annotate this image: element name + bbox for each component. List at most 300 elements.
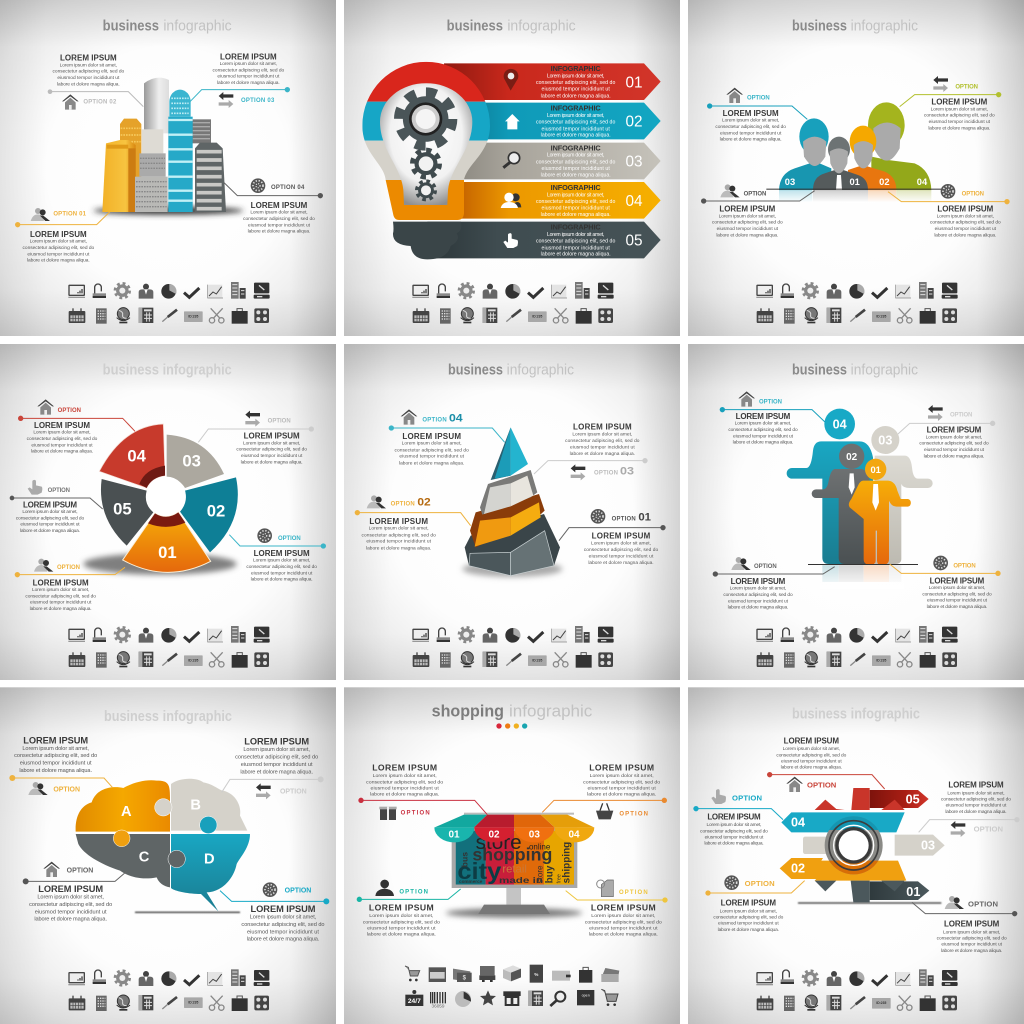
title: business [103,19,159,35]
banner 04: 04 [625,193,643,210]
text block top left: LOREM IPSUM [402,432,461,441]
text block 01: consectetur adipiscing elit, sed do [937,936,1007,942]
red teeth [815,788,905,810]
text block right: consectetur adipiscing elit, sed do [584,547,658,553]
option label teal: OPTION [399,889,428,895]
banner 03: eiusmod tempor incididunt ut [541,166,610,172]
screen: retail [502,863,527,875]
icon: sale [530,965,543,983]
icon: house [786,777,803,792]
text block top: Lorem ipsum dolor sit amet, [783,746,840,752]
leader: olive [900,92,1001,107]
icon: building [96,652,107,668]
text block A: labore et dolore magna aliqua. [19,768,92,774]
icon: pen [850,997,865,1009]
text block 03: LOREM IPSUM [244,432,300,441]
title: business [792,19,847,35]
icon rows [68,282,270,324]
ground line [766,189,941,190]
text block 02 [246,549,317,583]
banner 05: eiusmod tempor incididunt ut [541,245,610,251]
icon: persons [28,782,48,795]
banner 04: Lorem ipsum dolor sit amet, [547,192,604,198]
icon: briefcase [576,653,592,668]
leader: orange [355,510,471,526]
icon: pie [849,628,865,643]
text block A: LOREM IPSUM [23,735,88,745]
text block left top: labore et dolore magna aliqua. [720,137,782,143]
leader: option 04 [224,183,323,198]
text block top right: eiusmod tempor incididunt ut [587,785,656,791]
leader: teal [220,891,329,904]
icon: lock [437,628,450,642]
banner 02: INFOGRAPHIC [551,104,601,113]
text block left: Lorem ipsum dolor sit amet, [369,526,429,532]
icon: globe [591,509,605,524]
icon: globe [805,652,818,667]
option label 03: OPTION [594,471,618,477]
icon: check [184,975,199,985]
icon: pie [849,971,865,986]
icon: briefcase [232,996,248,1011]
text block right: LOREM IPSUM [592,532,651,541]
icon: pen [162,310,177,322]
screen: made in [499,875,543,885]
icon: monitor [68,285,85,298]
icon: monitor [68,972,85,985]
text block top left: Lorem ipsum dolor sit amet, [735,421,791,427]
text block 05 [941,781,1011,815]
banner 03: 03 [625,153,643,170]
text block top right: eiusmod tempor incididunt ut [924,447,985,453]
screen: city [457,858,502,884]
banner 01: INFOGRAPHIC [551,64,601,73]
text block 02: labore et dolore magna aliqua. [718,927,779,933]
leader: orange [705,881,805,896]
layered pyramid [462,427,562,577]
screen: store [536,865,545,883]
title [792,19,918,35]
icon: building [784,996,795,1011]
text block top right: Lorem ipsum dolor sit amet, [926,434,982,440]
leader: teal [720,407,825,422]
icon: id card: ID:235 [876,1001,886,1005]
icon: laptop [254,970,270,986]
shopping icon rows [405,965,619,1009]
text block right: Lorem ipsum dolor sit amet, [591,540,651,546]
piece C [76,834,170,887]
gear numbers: 03 [921,839,935,853]
awning numbers: 01 [448,829,460,840]
text block left bottom: consectetur adipiscing elit, sed do [712,220,783,226]
text block top left: Lorem ipsum dolor sit amet, [402,441,462,447]
text block top: consectetur adipiscing elit, sed do [776,752,847,758]
icon: calculator [139,652,153,667]
icon: briefcase [232,653,248,668]
text block 03: labore et dolore magna aliqua. [241,459,303,465]
icon: globe [117,652,130,667]
icon: arrows [933,76,948,92]
band teal [781,812,905,832]
text block left bottom [712,205,783,238]
text block top right [212,52,284,86]
icon: businessman [139,971,153,986]
text block left bottom: Lorem ipsum dolor sit amet, [719,213,776,219]
title: infographic [851,19,918,35]
text block B [235,737,318,775]
text block D: eiusmod tempor incididunt ut [247,929,319,935]
icon: chart [208,972,223,985]
option label 02: OPTION [391,502,415,508]
badge numbers: 02 [879,177,890,187]
icon: hand white [503,233,518,248]
icon: money: $ [463,975,467,981]
icon: businessman [483,284,497,299]
layer teal [491,427,528,480]
segment 01 [123,512,211,572]
icon: monitor [756,629,773,642]
icon: chart [552,285,567,298]
icon: laptop [254,627,270,643]
icon: arrows [951,821,965,837]
icon rows [68,969,270,1011]
icon: id card [872,998,891,1009]
icon: check [872,975,887,985]
panel: gear [688,687,1024,1024]
text block bottom right: eiusmod tempor incididunt ut [927,598,988,604]
text block top right: consectetur adipiscing elit, sed do [919,441,989,447]
banner 02: Lorem ipsum dolor sit amet, [547,113,604,119]
icon: calculator [139,995,153,1010]
icon: money [453,969,472,982]
wheel numbers: 04 [127,446,147,465]
wheel numbers: 05 [113,500,132,519]
icon: calendar [69,652,85,667]
text block 02: Lorem ipsum dolor sit amet, [253,558,310,564]
text block 03 [236,432,307,465]
icon: building [784,308,795,324]
text block bottom left: LOREM IPSUM [369,903,434,913]
icon: arrows [219,92,233,108]
text block top right: consectetur adipiscing elit, sed do [583,779,660,785]
option label gray: OPTION [280,788,307,795]
option label 04: 04 [449,412,463,424]
text block 01: labore et dolore magna aliqua. [941,948,1002,954]
icon: pie [161,628,177,643]
text block top left: eiusmod tempor incididunt ut [370,785,439,791]
icon: check [184,288,199,297]
text block top left: consectetur adipiscing elit, sed do [728,427,798,433]
icon: briefcase [920,309,936,324]
text block 01: eiusmod tempor incididunt ut [941,942,1003,948]
icon: towers [919,626,934,643]
icon: globe [117,995,130,1011]
title [447,19,576,35]
option label teal: OPTION [285,887,311,894]
gear numbers: 01 [906,885,920,899]
icon: building [440,652,451,668]
icon: globe [805,308,818,323]
icon: check [184,632,199,641]
reflection [779,190,931,202]
icon: check [872,288,887,297]
text block top left: eiusmod tempor incididunt ut [733,433,794,439]
text block 01: Lorem ipsum dolor sit amet, [32,587,89,593]
icon: box [503,965,521,981]
option label dark: OPTION [48,488,70,494]
icon: id card [184,997,203,1008]
title: infographic [163,19,232,35]
text block right top [924,98,995,131]
icon: calendar [757,308,773,323]
title: infographic [509,701,592,720]
title: infographic [851,363,918,379]
banner 01 [444,63,661,100]
text block 04: Lorem ipsum dolor sit amet, [33,430,91,436]
banner 04: INFOGRAPHIC [551,183,601,192]
title: shopping [432,701,504,720]
icon: badge [455,991,471,1007]
option label 03 [594,466,634,478]
text block top right: labore et dolore magna aliqua. [570,451,635,457]
text block top right: Lorem ipsum dolor sit amet, [590,773,654,779]
text block top left: consectetur adipiscing elit, sed do [394,447,469,453]
icon: towers [231,626,246,643]
leader: teal [707,103,807,119]
wheel chart [83,424,238,575]
text block bottom left: Lorem ipsum dolor sit amet, [369,913,433,919]
letters: A [121,804,132,820]
text block left bottom: eiusmod tempor incididunt ut [717,226,779,232]
icon: building [784,652,795,668]
icon: businessman [827,628,841,643]
icon: id card: ID:235 [532,314,542,318]
text block top left: eiusmod tempor incididunt ut [57,75,120,81]
wheel numbers: 01 [158,543,177,562]
option label teal: OPTION [732,793,762,802]
title: infographic [163,709,232,725]
text block top right: consectetur adipiscing elit, sed do [212,67,284,73]
icon: pen [850,310,865,322]
icon: id card: ID:235 [188,658,198,662]
gear large [399,92,453,146]
icon: grid [942,308,957,323]
icon: star [480,990,496,1005]
leader: red [767,772,885,789]
leader: dark [23,871,127,884]
text block top: LOREM IPSUM [784,736,839,745]
icon: globe [461,652,474,667]
panel: segmented wheel [0,344,336,680]
text block B: consectetur adipiscing elit, sed do [235,755,318,761]
screen: free [557,874,563,883]
title: business [792,706,847,722]
text block top right: Lorem ipsum dolor sit amet, [220,61,277,67]
text block top left: Lorem ipsum dolor sit amet, [60,62,117,68]
text block 05: consectetur adipiscing elit, sed do [16,515,84,521]
text block C: Lorem ipsum dolor sit amet, [37,895,104,901]
figure 01 orange [849,459,911,565]
icon: hand [711,789,726,804]
text block top right: labore et dolore magna aliqua. [587,792,656,798]
monitor [434,813,594,918]
text block 05: eiusmod tempor incididunt ut [20,522,80,528]
figure numbers: 04 [833,418,847,432]
piece B [171,779,247,831]
icon: globe [461,308,474,323]
panel: brain puzzle [0,687,336,1024]
icon: towers [231,969,246,986]
text block bottom left: consectetur adipiscing elit, sed do [723,592,793,598]
option label orange: OPTION [745,879,775,888]
icon: pin [504,69,518,91]
option label red: OPTION [807,781,837,790]
text block 04: eiusmod tempor incididunt ut [705,834,764,840]
gear ring top [829,816,878,830]
icon: pen [850,654,865,666]
text block D: LOREM IPSUM [251,904,316,914]
option label gray: OPTION [268,419,291,425]
icon: id card [872,655,891,666]
icon: grid [598,308,613,323]
icon: grid [254,996,269,1010]
icon: gear [459,283,474,298]
banner 02 [444,103,661,139]
icon: pie [161,284,177,299]
option label gray: OPTION [974,824,1003,833]
icon: businessman [483,628,497,643]
icon: sale: % [534,972,539,977]
icon: building [96,996,107,1011]
title dots [496,723,527,729]
figure 03 gray [871,426,933,564]
icon: id card [528,311,547,322]
badge numbers: 04 [917,177,928,187]
leader: dark [912,902,1017,916]
text block right bottom [930,205,1001,238]
text block top left: labore et dolore magna aliqua. [57,81,120,87]
icon: towers [919,969,934,986]
title [448,363,574,379]
figure numbers: 02 [846,452,858,463]
icon: id card: ID:235 [532,658,542,662]
icon: gear [803,283,818,298]
icon: businessman [827,971,841,986]
text block 05: Lorem ipsum dolor sit amet, [22,509,78,515]
text block bottom left: LOREM IPSUM [731,577,786,586]
text block right [584,532,658,566]
text block top left [394,432,469,466]
banner 05: labore et dolore magna aliqua. [541,252,611,258]
title: business [792,363,847,379]
text block bottom right [922,576,992,610]
icon: chart [208,285,223,298]
layer dark [465,514,560,576]
screen: store [476,831,522,854]
bust 01 dark [813,137,868,190]
icon: pen [506,654,521,666]
icon: chart [896,285,911,298]
text block left [361,517,436,551]
leader: teal [693,806,783,820]
text block right top: Lorem ipsum dolor sit amet, [931,106,988,112]
text block B: labore et dolore magna aliqua. [240,769,313,775]
option label 01: OPTION [612,517,636,523]
inner shadow top [139,466,165,488]
text block C: consectetur adipiscing elit, sed do [29,902,112,908]
icon: cart down [405,966,420,981]
banner 04: labore et dolore magna aliqua. [541,212,611,218]
icon: calendar [413,308,429,323]
icon rows [756,282,958,324]
option label orange: OPTION [962,191,984,197]
text block right top: labore et dolore magna aliqua. [928,125,990,131]
icon: monitor [756,285,773,298]
banner 05: consectetur adipiscing elit, sed do [536,239,615,245]
text block 02: LOREM IPSUM [254,549,310,558]
icon: businessman [139,284,153,299]
text block top: eiusmod tempor incididunt ut [781,758,842,764]
banner 03: INFOGRAPHIC [551,143,601,152]
text block left: LOREM IPSUM [369,517,428,526]
reflection fade [775,191,935,203]
text block 04: eiusmod tempor incididunt ut [31,442,93,448]
icon rows [756,969,958,1011]
text block 02: labore et dolore magna aliqua. [251,577,313,583]
text block top right: LOREM IPSUM [220,52,277,61]
text block right bottom: labore et dolore magna aliqua. [934,232,996,238]
icon: pie [505,284,521,299]
option label dark: OPTION [744,191,766,197]
text block bottom left [363,903,440,938]
icon: laptop [942,283,958,299]
icon: lock [781,970,794,984]
option label teal: OPTION [278,536,301,542]
icon rows [412,282,614,324]
icon: pen [162,654,177,666]
icon: pen [162,997,177,1009]
text block left: consectetur adipiscing elit, sed do [361,532,436,538]
screen: online [529,843,551,852]
icon: house [401,409,417,425]
title: business [103,363,159,379]
leader: gray [222,776,324,792]
text block bottom left: Lorem ipsum dolor sit amet, [730,586,786,592]
icon: persons white [501,193,521,208]
screen: buy [545,865,556,883]
figure numbers: 01 [870,465,881,475]
banner 03 [444,143,661,179]
text block top right: LOREM IPSUM [927,426,982,435]
title [103,363,232,379]
screen: commerce [459,879,483,884]
wheel numbers: 03 [182,452,201,471]
icon: check [528,632,543,641]
figure numbers: 03 [878,434,892,448]
gear ring [825,816,883,874]
text block bottom left: labore et dolore magna aliqua. [27,258,90,264]
layer orange [470,494,545,547]
icon: monitor [412,629,429,642]
text block 03: consectetur adipiscing elit, sed do [236,447,307,453]
text block right bottom: LOREM IPSUM [937,205,994,214]
icon: globe [263,882,277,897]
icon: businessman [827,284,841,299]
text block 02: Lorem ipsum dolor sit amet, [720,908,777,914]
leader: red [358,798,487,815]
icon: globe [724,875,739,890]
icon: calendar [413,652,429,667]
